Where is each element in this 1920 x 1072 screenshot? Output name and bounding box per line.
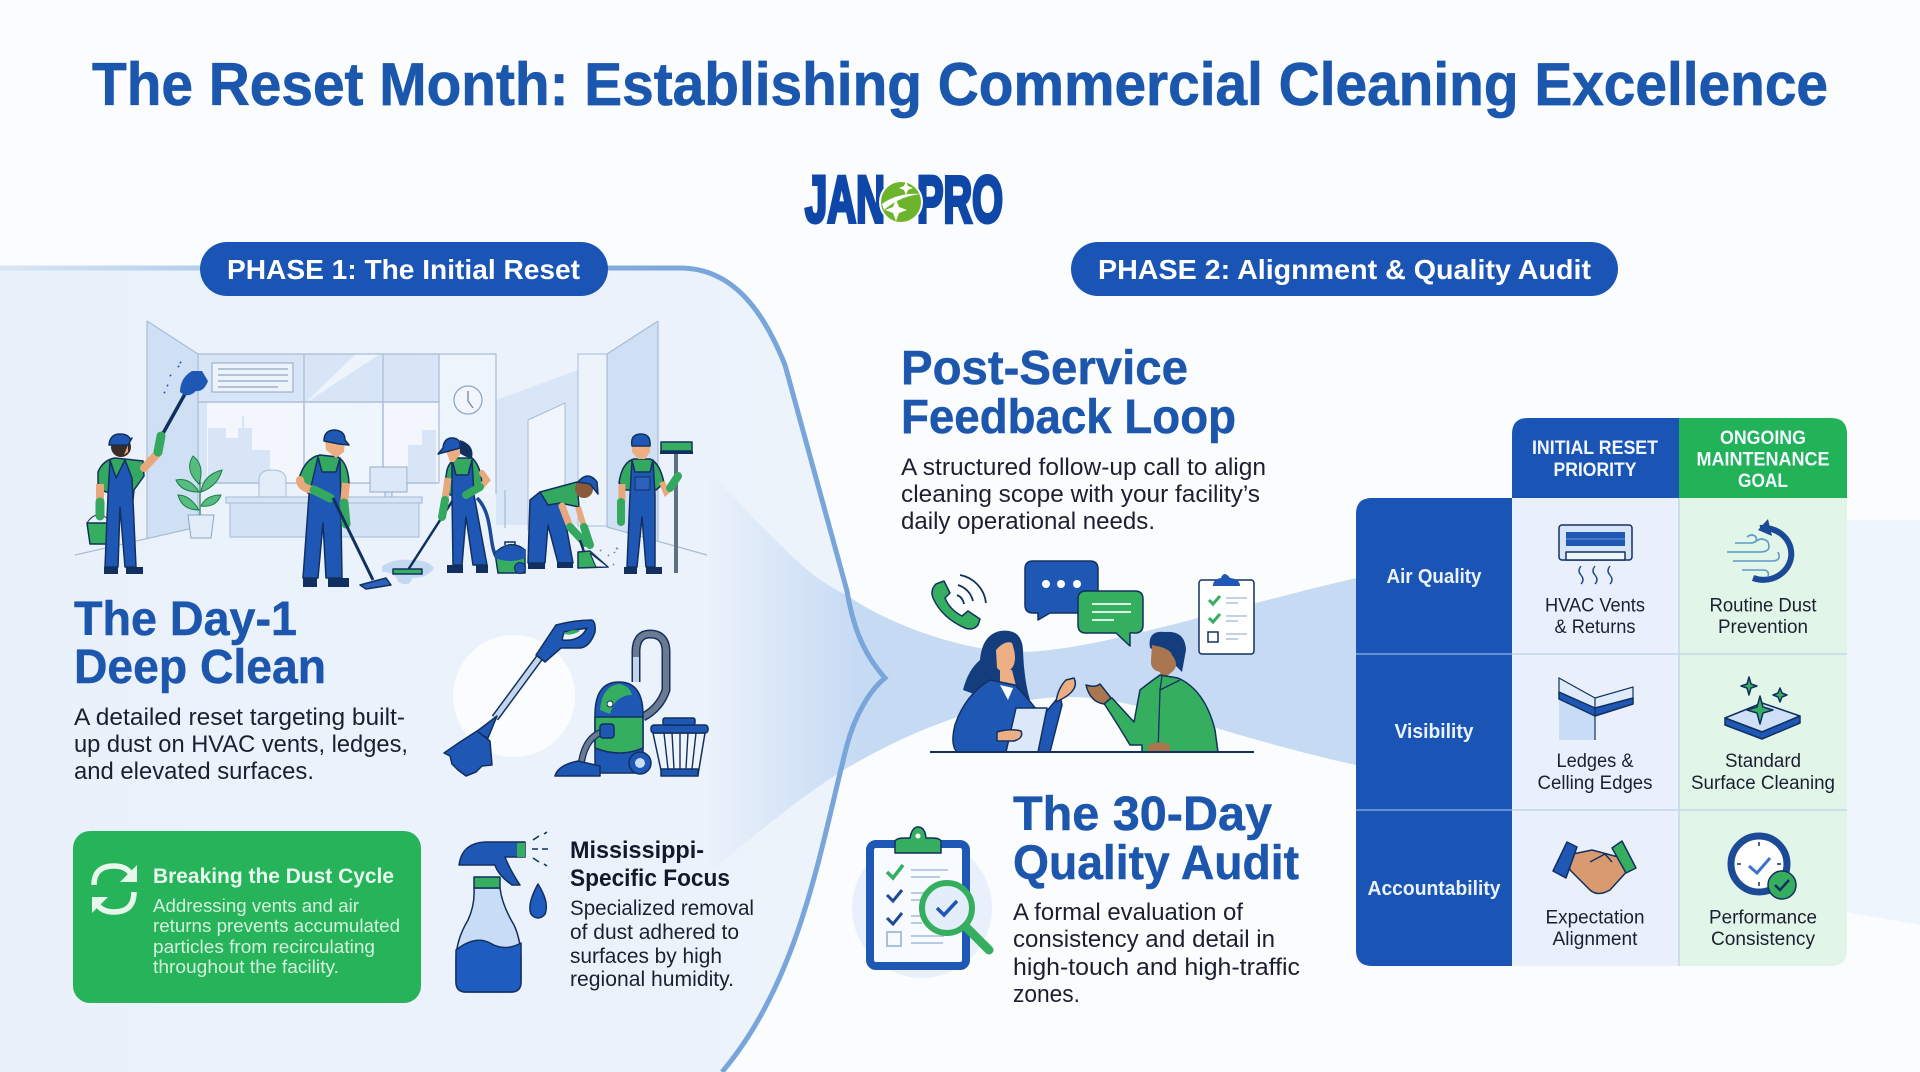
cell: ledges and ceiling edges: Celling Edges: [1538, 773, 1652, 794]
cell: standard surface cleaning: [1691, 677, 1835, 794]
cell: routine dust prevention: Prevention: [1718, 617, 1808, 638]
row labels: [1356, 498, 1512, 966]
panel outline arrow: [0, 268, 885, 1072]
cell: performance consistency: [1709, 836, 1817, 950]
callout: Breaking the Dust Cycle: returns prevents accumulated: [153, 916, 400, 936]
callout: Breaking the Dust Cycle: particles from recirculating: [153, 937, 375, 957]
text: Day-1 description: [74, 704, 408, 785]
cell: routine dust prevention: Routine Dust: [1710, 596, 1817, 616]
text: Mississippi-Specific Focus: Specialized removal: [570, 897, 754, 920]
phase 2 pill: [1071, 242, 1618, 296]
office room illustration: [75, 321, 707, 584]
phase 2 pill: PHASE 2: Alignment & Quality Audit: [1098, 254, 1591, 285]
woman: [953, 631, 1075, 752]
logo: JAN-PRO: [805, 162, 1003, 236]
panel: phase 1 background: [0, 268, 885, 1072]
text: audit description: A formal evaluation of: [1013, 899, 1243, 926]
text: Mississippi-Specific Focus: regional humidity.: [570, 968, 734, 991]
heading: 30-Day Quality Audit: The 30-Day: [1013, 788, 1272, 841]
cell: HVAC vents: & Returns: [1554, 617, 1636, 638]
cell: expectation alignment: Alignment: [1552, 929, 1638, 950]
heading: Post-Service Feedback Loop: Post-Service: [901, 342, 1188, 395]
row labels: Visibility: [1394, 721, 1474, 743]
header: initial reset priority: PRIORITY: [1554, 460, 1637, 481]
text: Mississippi-Specific Focus: surfaces by high: [570, 945, 722, 968]
row labels: Accountability: [1368, 878, 1501, 900]
heading: Post-Service Feedback Loop: Feedback Loop: [901, 391, 1236, 444]
text: Mississippi-Specific Focus: of dust adhered to: [570, 921, 739, 944]
callout: Breaking the Dust Cycle: Breaking the Dust Cycle: [153, 865, 394, 888]
phase 1 pill: PHASE 1: The Initial Reset: [227, 254, 580, 285]
header: ongoing maintenance goal: GOAL: [1738, 471, 1788, 492]
heading: Day-1 Deep Clean: The Day-1: [74, 593, 297, 646]
comparison table: [1356, 418, 1847, 966]
icon: mop and vacuum: [444, 620, 708, 776]
icon: refresh: [92, 865, 137, 913]
header: initial reset priority: [1512, 418, 1679, 498]
cell: ledges and ceiling edges: Ledges &: [1556, 751, 1634, 772]
header: initial reset priority: INITIAL RESET: [1532, 438, 1658, 459]
callout: Breaking the Dust Cycle: [73, 831, 421, 1003]
cell: performance consistency: Consistency: [1711, 929, 1815, 950]
logo: JAN-PRO: PRO: [917, 162, 1003, 236]
text: Day-1 description: A detailed reset targeting built-: [74, 704, 405, 731]
cell: routine dust prevention: [1710, 519, 1817, 638]
icon: checklist: [1199, 574, 1254, 654]
flow band to table: [700, 465, 1920, 925]
cell: performance consistency: Performance: [1709, 908, 1817, 928]
heading: Day-1 Deep Clean: Deep Clean: [74, 641, 326, 694]
table cell backgrounds: [1512, 498, 1847, 966]
cell: ledges and ceiling edges: [1538, 678, 1652, 794]
text: feedback description: [901, 454, 1266, 535]
man: [1086, 632, 1218, 752]
phase 1 pill: [200, 242, 608, 296]
text: feedback description: daily operational needs.: [901, 508, 1155, 535]
illustration: feedback conversation: [930, 561, 1254, 752]
text: audit description: zones.: [1013, 981, 1080, 1008]
cleaner with mop: [298, 430, 391, 589]
text: Mississippi-Specific Focus: [570, 837, 754, 991]
row labels: Air Quality: [1386, 566, 1482, 588]
cleaner with vacuum: [393, 438, 526, 574]
cell: HVAC vents: HVAC Vents: [1545, 596, 1645, 616]
callout: Breaking the Dust Cycle: throughout the facility.: [153, 957, 339, 977]
cell: standard surface cleaning: Standard: [1725, 751, 1801, 772]
icon: spray bottle: [456, 832, 548, 992]
cleaner with squeegee: [619, 434, 693, 574]
heading: 30-Day Quality Audit: Quality Audit: [1013, 837, 1299, 890]
text: Day-1 description: and elevated surfaces.: [74, 758, 314, 785]
cleaner with dustpan: [528, 476, 618, 569]
icon: phone: [932, 575, 986, 629]
icon: audit clipboard: [852, 827, 992, 978]
text: Mississippi-Specific Focus: Specific Focus: [570, 865, 730, 892]
cell: HVAC vents: [1545, 525, 1645, 638]
text: feedback description: cleaning scope with your facility’s: [901, 481, 1260, 508]
cell: standard surface cleaning: Surface Cleaning: [1691, 773, 1835, 794]
title: The Reset Month: Establishing Commercial Cleaning Excellence: [92, 51, 1828, 118]
plant: [176, 456, 222, 538]
text: audit description: consistency and detail in: [1013, 926, 1275, 953]
icon: speech bubbles: [1025, 561, 1143, 646]
text: Day-1 description: up dust on HVAC vents, ledges,: [74, 731, 408, 758]
header: ongoing maintenance goal: MAINTENANCE: [1696, 450, 1830, 470]
callout: Breaking the Dust Cycle: Addressing vents and air: [153, 896, 359, 916]
cell: expectation alignment: Expectation: [1546, 908, 1644, 928]
text: audit description: high-touch and high-traffic: [1013, 954, 1300, 981]
heading: Day-1 Deep Clean: [74, 593, 326, 694]
logo: JAN-PRO: JAN: [805, 162, 885, 236]
heading: 30-Day Quality Audit: [1013, 788, 1299, 890]
cell: expectation alignment: [1546, 841, 1644, 950]
header: ongoing maintenance goal: [1679, 418, 1847, 498]
text: Mississippi-Specific Focus: Mississippi-: [570, 837, 704, 864]
heading: Post-Service Feedback Loop: [901, 342, 1236, 444]
text: audit description: [1013, 899, 1300, 1008]
cleaner with duster: [87, 362, 208, 574]
header: ongoing maintenance goal: ONGOING: [1720, 428, 1806, 449]
text: feedback description: A structured follow-up call to align: [901, 454, 1266, 481]
